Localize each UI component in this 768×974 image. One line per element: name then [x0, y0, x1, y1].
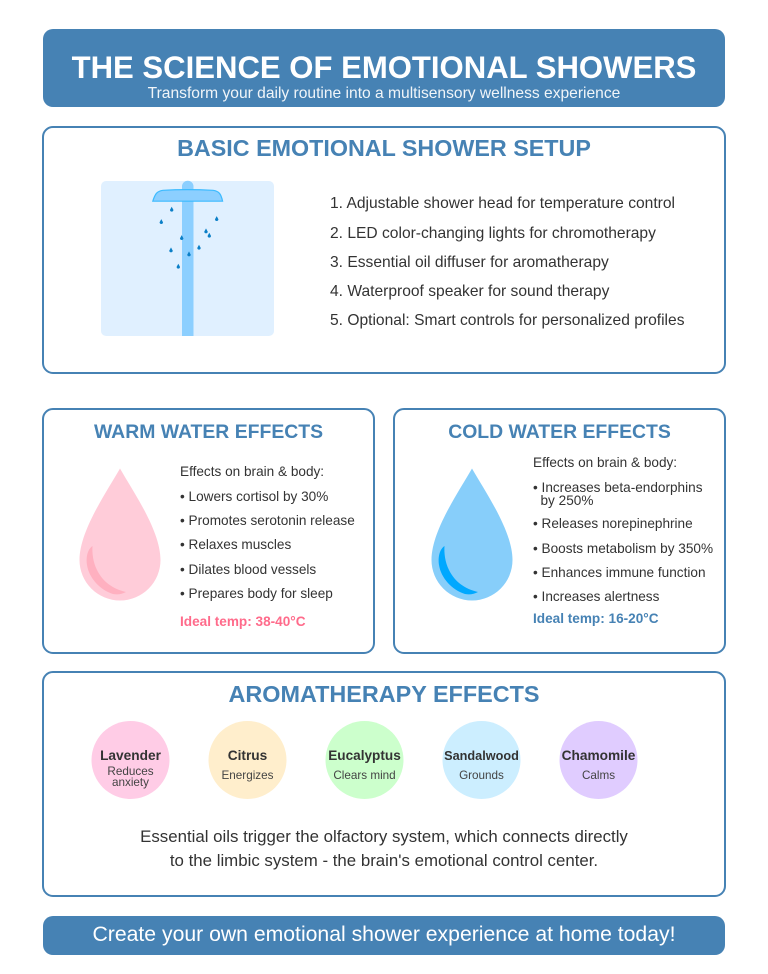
aromatherapy explanation: to the limbic system - the brain's emotional control center. [170, 851, 598, 870]
warm effects list: • Prepares body for sleep [180, 586, 333, 601]
subtitle: Transform your daily routine into a multisensory wellness experience [148, 85, 620, 102]
aromatherapy explanation: Essential oils trigger the olfactory system, which connects directly [140, 827, 628, 846]
oil: citrus: Energizes [222, 769, 274, 782]
setup list: 2. LED color-changing lights for chromotherapy [330, 225, 656, 242]
warm effects list: • Promotes serotonin release [180, 513, 355, 528]
cold effects list: Effects on brain & body: [533, 455, 677, 470]
oil: lavender: anxiety [112, 776, 149, 789]
cold effects list: • Enhances immune function [533, 565, 706, 580]
aromatherapy heading: AROMATHERAPY EFFECTS [228, 681, 540, 707]
cold effects list: • Boosts metabolism by 350% [533, 541, 713, 556]
warm effects list: • Relaxes muscles [180, 537, 291, 552]
water drops [160, 207, 218, 269]
oil: chamomile [560, 721, 638, 799]
oil: eucalyptus [326, 721, 404, 799]
oil: sandalwood: Sandalwood [444, 749, 519, 763]
warm heading: WARM WATER EFFECTS [94, 421, 323, 443]
oil: sandalwood [442, 721, 520, 799]
oil: lavender: Reduces [107, 765, 154, 778]
footer text: Create your own emotional shower experience at home today! [93, 923, 675, 946]
panel: aromatherapy [43, 672, 725, 896]
warm ideal temperature: Ideal temp: 38-40°C [180, 614, 306, 629]
warm effects list [180, 464, 355, 601]
cold heading: COLD WATER EFFECTS [448, 421, 671, 443]
cold effects list: • Increases alertness [533, 589, 660, 604]
oil: lavender [92, 721, 170, 799]
oil: eucalyptus: Eucalyptus [328, 748, 401, 763]
oil: sandalwood: Grounds [459, 769, 504, 782]
setup heading: BASIC EMOTIONAL SHOWER SETUP [177, 135, 591, 161]
cold effects list [533, 455, 713, 604]
setup list: 3. Essential oil diffuser for aromatherapy [330, 254, 609, 271]
setup list: 4. Waterproof speaker for sound therapy [330, 283, 610, 300]
warm effects list: • Dilates blood vessels [180, 562, 316, 577]
oil: eucalyptus: Clears mind [333, 769, 396, 782]
panel: warm water [43, 409, 374, 653]
footer banner [43, 916, 725, 955]
oil: citrus: Citrus [228, 748, 268, 763]
panel: basic setup [43, 127, 725, 373]
oil: citrus [208, 721, 286, 799]
cold effects list: • Releases norepinephrine [533, 516, 693, 531]
icon: cold drop [432, 468, 512, 600]
title: THE SCIENCE OF EMOTIONAL SHOWERS [72, 50, 696, 85]
cold ideal temperature: Ideal temp: 16-20°C [533, 611, 659, 626]
oil: chamomile: Chamomile [562, 748, 636, 763]
warm effects list: • Lowers cortisol by 30% [180, 489, 328, 504]
setup list [330, 195, 685, 329]
warm effects list: Effects on brain & body: [180, 464, 324, 479]
oil: lavender: Lavender [100, 748, 162, 763]
cold effects list: by 250% [540, 493, 593, 508]
setup list: 1. Adjustable shower head for temperature control [330, 195, 675, 212]
aromatherapy explanation [140, 827, 628, 870]
cold effects list: • Increases beta-endorphins [533, 480, 703, 495]
panel: cold water [394, 409, 725, 653]
setup list: 5. Optional: Smart controls for personalized profiles [330, 312, 685, 329]
illustration: shower [101, 181, 274, 336]
header banner [43, 29, 725, 107]
oil: chamomile: Calms [582, 769, 615, 782]
icon: warm drop [80, 468, 160, 600]
